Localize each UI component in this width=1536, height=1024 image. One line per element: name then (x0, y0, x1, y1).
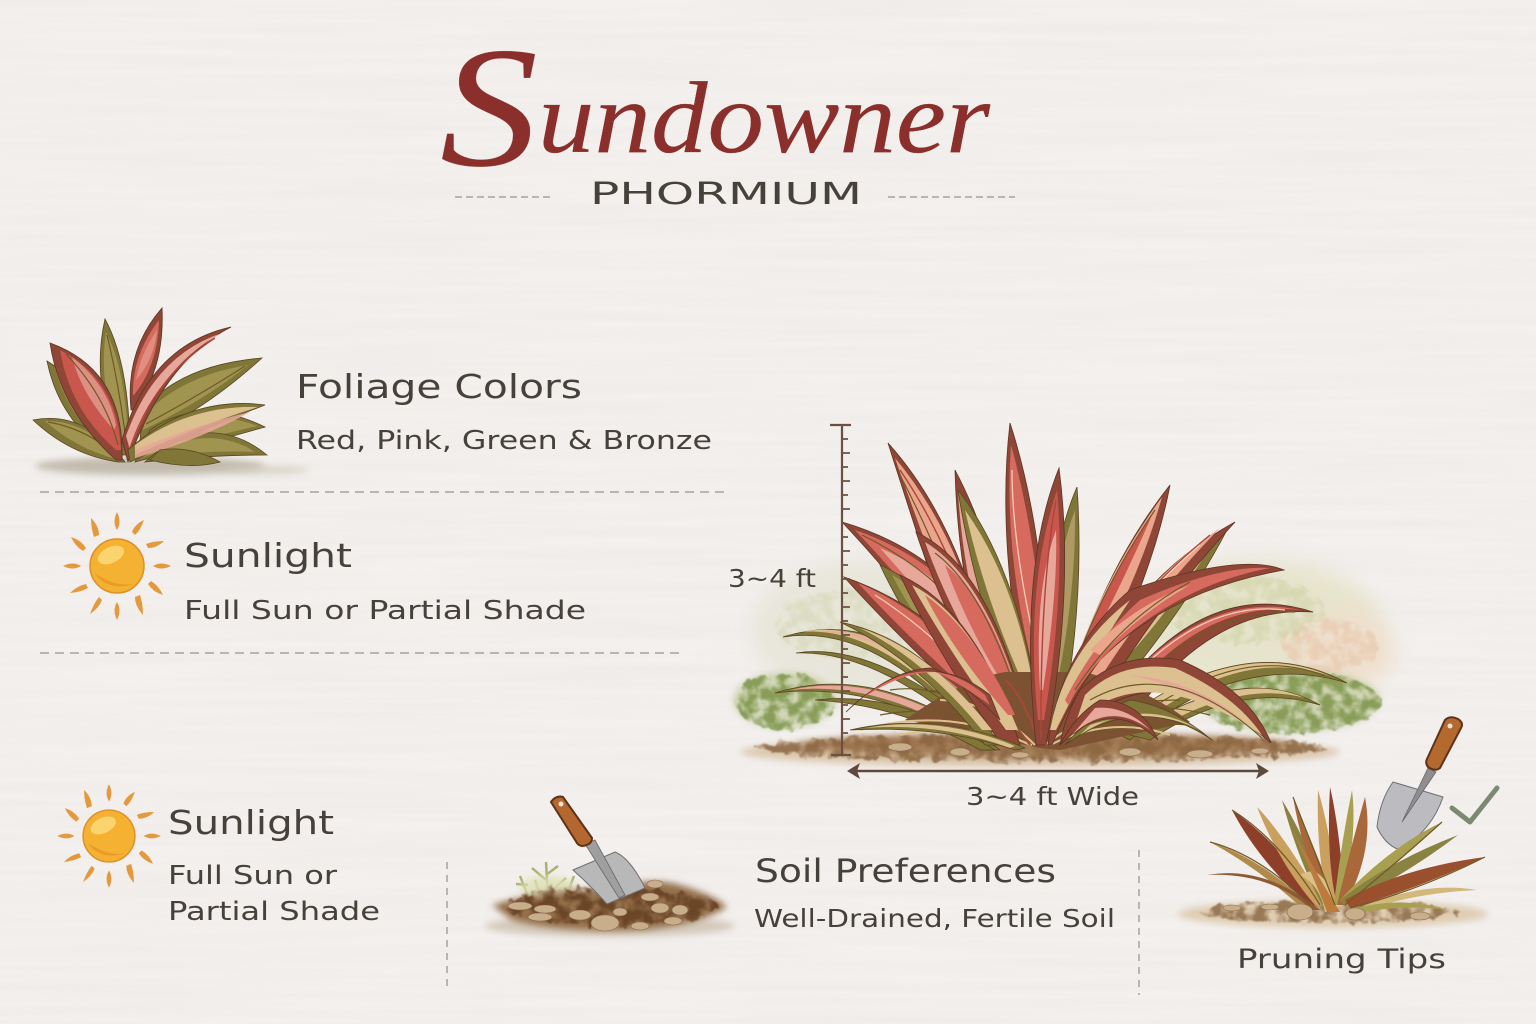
heading: soil preferences: Soil Preferences (755, 852, 1056, 890)
background haze and bushes (733, 560, 1395, 734)
back leaves (775, 423, 1347, 750)
text: full sun or partial shade: Full Sun or (168, 861, 337, 891)
soil bed (740, 733, 1340, 767)
front leaves (840, 468, 1284, 750)
heading: sunlight: Sunlight (184, 536, 352, 575)
panel: pruning tips (1178, 717, 1497, 975)
icon: sun (63, 512, 171, 620)
panel: sunlight (upper) (63, 512, 586, 626)
icon: check mark (1452, 788, 1497, 822)
panel: foliage colors (33, 308, 712, 475)
base fan of strands (860, 672, 1210, 750)
text: full sun or partial shade: Partial Shade (168, 897, 380, 927)
height label: 3~4 ft (728, 564, 816, 593)
panel: soil preferences (485, 797, 1115, 937)
icon: trowel in soil (485, 797, 735, 937)
subtitle: Phormium: PHORMIUM (590, 177, 862, 212)
text: foliage colors: Red, Pink, Green & Bronze (296, 426, 712, 456)
heading: sunlight: Sunlight (168, 803, 334, 842)
text: soil preferences: Well-Drained, Fertile Soil (754, 904, 1115, 933)
title: Sundowner (440, 13, 990, 203)
main plant illustration (733, 423, 1395, 767)
text: full sun or partial shade (168, 861, 380, 927)
text: sunlight: Full Sun or Partial Shade (184, 596, 586, 626)
height ruler (830, 425, 851, 755)
icon: sun (57, 784, 161, 888)
title: Sundowner: S (440, 13, 538, 203)
seedling (516, 862, 574, 898)
trowel (1377, 717, 1462, 850)
panel: sunlight (lower) (57, 784, 380, 927)
icon: pruned plant with trowel (1178, 717, 1488, 928)
width arrow (847, 763, 1269, 779)
heading: foliage colors: Foliage Colors (296, 367, 582, 406)
width label: 3~4 ft Wide (966, 782, 1139, 811)
heading: pruning tips: Pruning Tips (1237, 944, 1446, 975)
icon: small foliage plant (33, 308, 310, 475)
title: Sundowner: undowner (538, 62, 990, 175)
